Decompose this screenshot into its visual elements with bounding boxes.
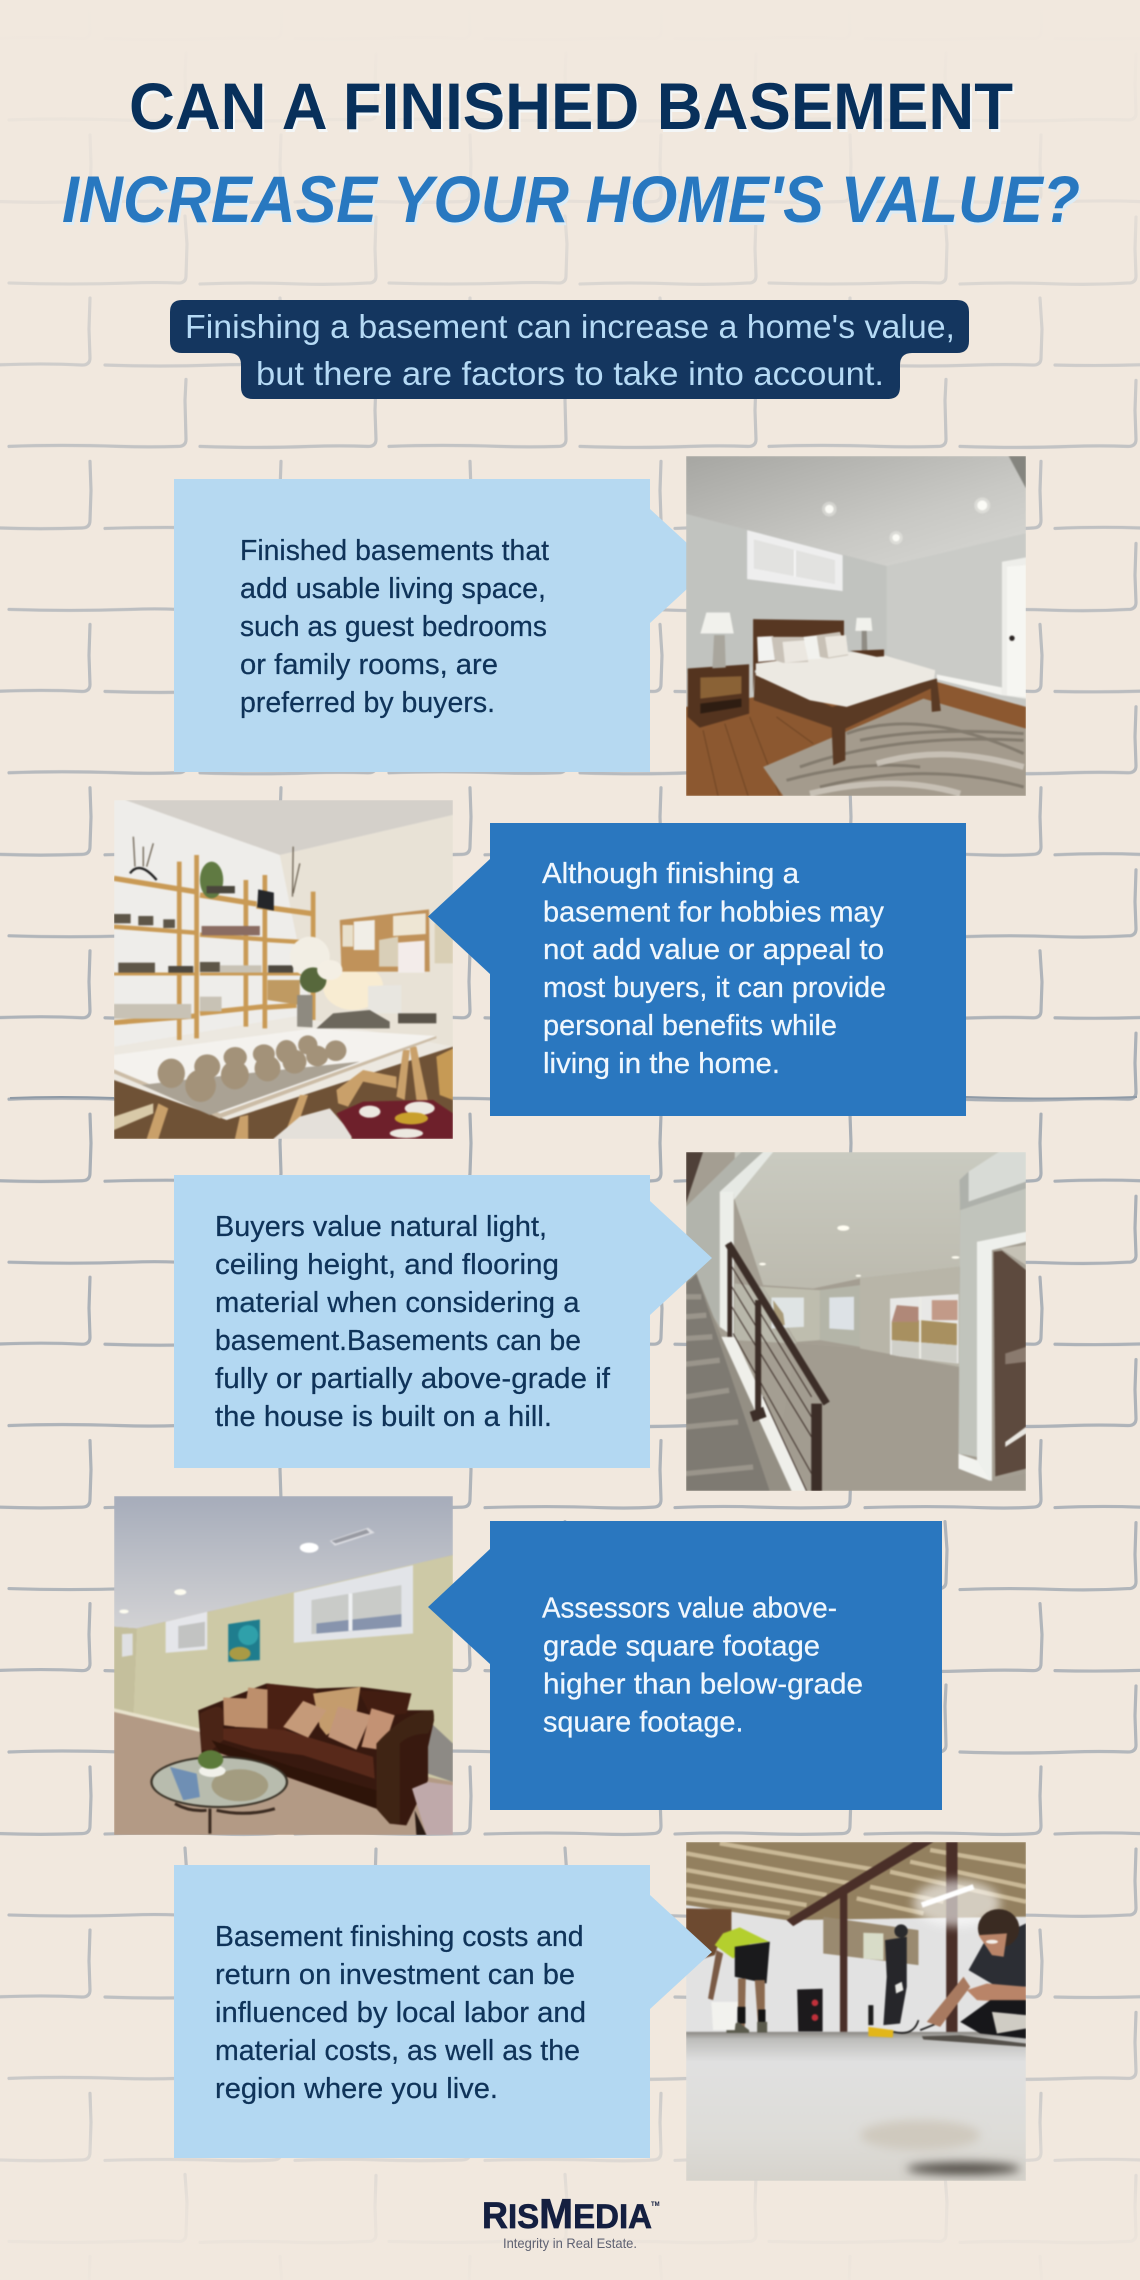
panel: usable living space: preferred by buyers. xyxy=(240,687,495,719)
photo: workers finishing unfinished basement xyxy=(686,1842,1026,2181)
photo: hobby pottery studio xyxy=(114,800,453,1139)
panel: natural light and materials: Buyers value natural light, xyxy=(215,1211,547,1243)
panel: natural light and materials xyxy=(174,1175,712,1468)
panel: costs and ROI: influenced by local labor and xyxy=(215,1997,586,2029)
panel: natural light and materials: ceiling height, and flooring xyxy=(215,1249,559,1281)
photo: basement living room xyxy=(114,1496,453,1835)
panel: costs and ROI: material costs, as well as the xyxy=(215,2035,580,2067)
panel: natural light and materials: the house is built on a hill. xyxy=(215,1401,552,1433)
panel: usable living space: Finished basements that xyxy=(240,535,549,567)
panel: assessors: square footage. xyxy=(543,1706,744,1738)
panel: costs and ROI: Basement finishing costs and xyxy=(215,1921,584,1953)
panel: hobby basements: not add value or appeal to xyxy=(543,934,884,966)
panel: assessors: grade square footage xyxy=(543,1630,820,1662)
panel: hobby basements: most buyers, it can provide xyxy=(543,972,886,1004)
logo: RISMedia: Integrity in Real Estate. xyxy=(503,2235,637,2251)
logo: RISMedia: TM xyxy=(651,2202,660,2208)
subtitle pill: but there are factors to take into account. xyxy=(256,355,884,392)
photo: guest bedroom xyxy=(686,456,1026,796)
panel: costs and ROI: return on investment can be xyxy=(215,1959,575,1991)
title xyxy=(62,69,1081,236)
panel: hobby basements: personal benefits while xyxy=(543,1010,837,1042)
panel: hobby basements xyxy=(428,823,966,1116)
panel: usable living space: or family rooms, are xyxy=(240,649,498,681)
panel: costs and ROI: region where you live. xyxy=(215,2073,498,2105)
panel: usable living space: add usable living space, xyxy=(240,573,546,605)
panel: assessors: Assessors value above- xyxy=(542,1592,837,1624)
panel: hobby basements: basement for hobbies may xyxy=(543,896,884,928)
panel: costs and ROI xyxy=(174,1865,712,2158)
panel: hobby basements: Although finishing a xyxy=(542,858,800,890)
subtitle pill xyxy=(170,300,969,399)
subtitle pill: Finishing a basement can increase a home's value, xyxy=(185,308,955,345)
panel: natural light and materials: fully or partially above-grade if xyxy=(215,1363,611,1395)
photo: staircase and carpeted room xyxy=(686,1152,1026,1491)
panel: hobby basements: living in the home. xyxy=(543,1048,780,1080)
panel: natural light and materials: material when considering a xyxy=(215,1287,580,1319)
panel: assessors xyxy=(428,1521,942,1810)
title line 1: CAN A FINISHED BASEMENT xyxy=(129,69,1013,143)
panel: usable living space: such as guest bedrooms xyxy=(240,611,547,643)
panel: assessors: higher than below-grade xyxy=(543,1668,863,1700)
panel: usable living space xyxy=(174,479,687,772)
panel: natural light and materials: basement.Basements can be xyxy=(215,1325,581,1357)
